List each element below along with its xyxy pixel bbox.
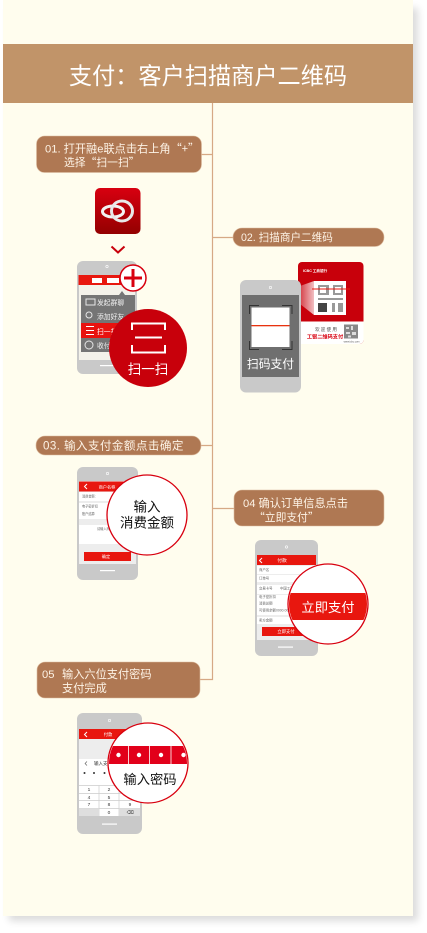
- QR merchant card: 工银二维码支付: [307, 332, 344, 340]
- phone 4 order form: 交易卡号: [259, 586, 273, 590]
- phone 1 with menu: 发起群聊: [97, 298, 124, 307]
- step 05 label: 支付完成: [62, 681, 107, 695]
- phone 5 keypad: ⌫: [127, 810, 134, 816]
- phone 5 keypad: 8: [108, 802, 111, 808]
- phone 4 order form: 消费总额: [259, 600, 273, 606]
- callout: enter amount: [107, 475, 187, 555]
- phone 4 order form: 商户名: [259, 567, 269, 572]
- phone 5 keypad: 输入支付密码: [94, 760, 121, 767]
- phone 3 amount form: 商户名称: [99, 484, 115, 490]
- phone 4 order form: 可使用余额0000.00: [259, 608, 288, 612]
- callout: pay now: [288, 564, 368, 644]
- step 01 label: [36, 136, 202, 172]
- phone 5 keypad: 1: [88, 787, 91, 793]
- step 02 label: 02. 扫描商户二维码: [241, 231, 333, 244]
- QR merchant card: www.icbc.com: [344, 340, 359, 344]
- phone 1 with menu: 扫一扫: [97, 327, 118, 336]
- callout: plus button: [120, 265, 146, 291]
- callout: enter password: 输入密码: [123, 771, 177, 787]
- QR merchant card: 欢 迎 使 用: [315, 326, 337, 333]
- callout: scan circle: [109, 309, 187, 387]
- step 05 label: 05: [42, 669, 54, 681]
- title banner: 支付：客户扫描商户二维码: [69, 63, 347, 89]
- phone 5 keypad: [77, 713, 142, 834]
- title banner: [3, 44, 413, 103]
- phone 4 order form: 电子密折扣: [259, 594, 277, 599]
- callout: enter password: [108, 723, 188, 803]
- phone 5 keypad: 付款: [104, 731, 113, 738]
- phone 4 order form: 付款: [277, 557, 287, 564]
- icon: app logo: [95, 188, 140, 234]
- phone 3 amount form: 账户结算: [82, 511, 96, 516]
- phone 3 amount form: 电子密折扣: [82, 504, 98, 508]
- phone 5 keypad: 0: [108, 810, 111, 816]
- phone 4 order form: [255, 540, 318, 656]
- phone 4 order form: 订单号: [259, 576, 270, 580]
- phone 2 scanning: [240, 280, 301, 392]
- step 05 label: [37, 662, 200, 698]
- phone 5 keypad: 7: [88, 802, 91, 808]
- step 04 label: 04 确认订单信息点击: [243, 496, 348, 510]
- icon: down chevron: [112, 246, 124, 252]
- phone 2 scanning: 扫码支付: [247, 357, 294, 371]
- step 03 label: [36, 436, 201, 455]
- phone 4 order form: 立即支付: [277, 628, 295, 635]
- phone 3 amount form: 请输入商户: [97, 526, 113, 531]
- phone 1 with menu: [77, 261, 137, 374]
- step 01 label: 01. 打开融e联点击右上角“+”: [45, 140, 199, 156]
- step 04 label: [234, 490, 384, 526]
- callout: scan circle: 扫一扫: [128, 362, 168, 377]
- QR merchant card: ICBC 工商银行: [303, 268, 328, 273]
- step 02 label: [233, 228, 384, 246]
- callout: pay now: 立即支付: [301, 600, 355, 615]
- phone 1 with menu: 添加好友: [97, 312, 124, 321]
- phone 5 keypad: 9: [129, 802, 132, 808]
- phone 1 with menu: 收付款: [97, 341, 118, 350]
- phone 3 amount form: 确定: [102, 553, 110, 560]
- phone 3 amount form: [77, 467, 138, 580]
- step 05 label: 输入六位支付密码: [62, 667, 152, 681]
- step 03 label: 03. 输入支付金额点击确定: [43, 438, 184, 452]
- timeline connector: [200, 103, 234, 680]
- callout: enter amount: 输入: [134, 500, 161, 514]
- phone 4 order form: 中国工商: [280, 586, 294, 590]
- callout: enter amount: 消费金额: [120, 516, 174, 530]
- phone 5 keypad: 5: [108, 795, 111, 801]
- phone 5 keypad: 4: [88, 795, 91, 801]
- step 01 label: 选择“扫一扫”: [64, 154, 140, 170]
- QR merchant card: [298, 262, 364, 344]
- phone 4 order form: 卖方金额: [259, 618, 273, 622]
- phone 3 amount form: 消费金额:: [82, 494, 96, 498]
- step 04 label: “立即支付”: [254, 509, 319, 525]
- phone 5 keypad: 2: [108, 787, 111, 793]
